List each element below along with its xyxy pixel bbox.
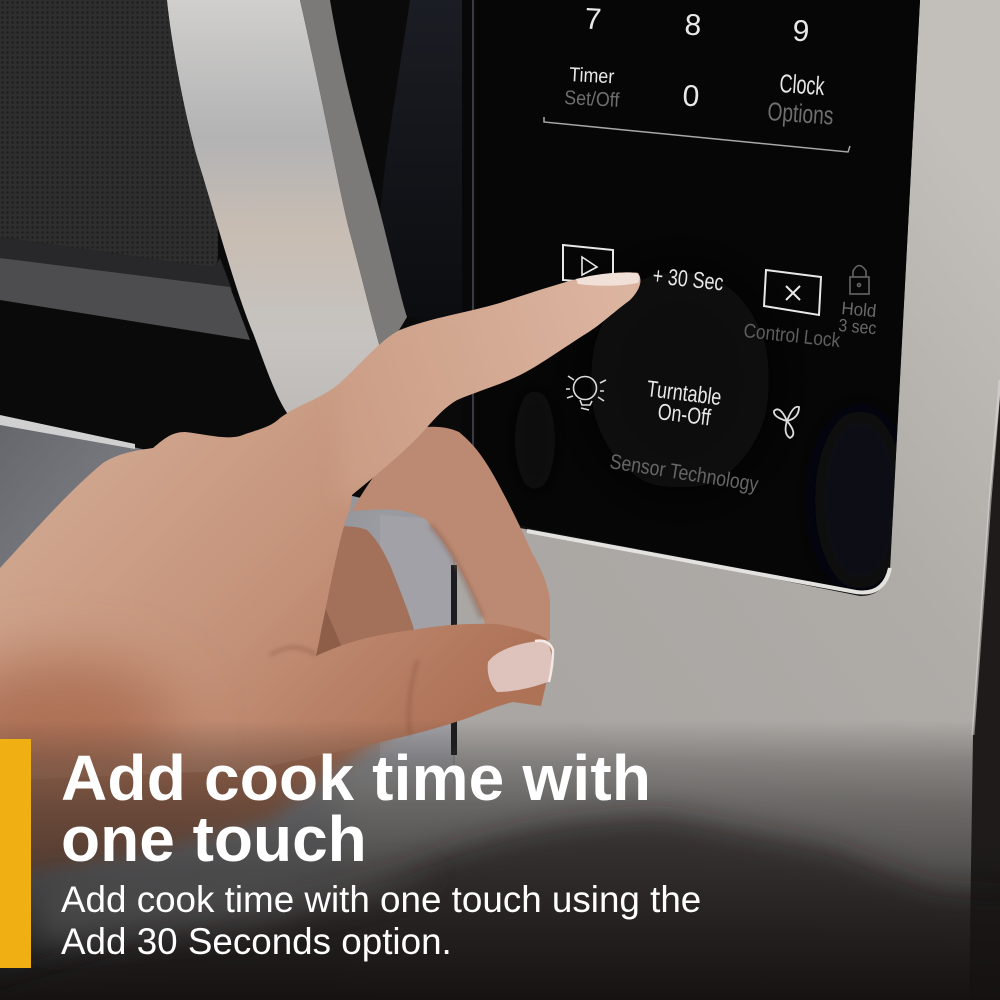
ring finger [298, 526, 422, 670]
control panel labels: 7 [584, 3, 602, 36]
control panel labels: Set/Off [564, 87, 620, 112]
blurred palm base [0, 725, 400, 872]
icon: light bulb [566, 376, 606, 410]
middle finger [352, 427, 550, 640]
control panel labels: On-Off [656, 398, 713, 430]
steel corner edge highlight [973, 380, 1000, 735]
control panel labels: Turntable [645, 375, 723, 410]
icon: cancel button [764, 270, 821, 315]
finger creases [270, 648, 418, 735]
control panel labels: Hold [841, 298, 877, 321]
icon: play button [563, 245, 613, 284]
blurred lower steel blend [340, 775, 600, 1000]
stainless steel frame [455, 0, 1000, 1000]
body text: Add 30 Seconds option. [61, 921, 452, 962]
panel reflections [824, 422, 894, 578]
control panel labels: 0 [682, 80, 700, 113]
body text: Add cook time with one touch using the [61, 879, 701, 920]
control panel labels: 9 [792, 15, 810, 48]
blurred grey foreground band [40, 870, 440, 945]
control panel labels: 8 [684, 9, 702, 42]
control panel labels: 3 sec [838, 315, 877, 338]
control panel labels [564, 3, 877, 496]
panel bright edge [527, 531, 890, 592]
thumb nail tip [535, 641, 553, 682]
icon: lock [850, 266, 869, 294]
bracket line [544, 117, 850, 152]
control panel labels: Timer [569, 64, 615, 88]
control panel labels: Control Lock [742, 320, 842, 352]
heading [61, 742, 651, 875]
door seam and silver strip [380, 515, 457, 1000]
yellow accent bar [0, 739, 31, 968]
ring finger shade [298, 591, 344, 660]
control panel labels: Options [767, 96, 835, 131]
body text [61, 879, 701, 962]
control panel labels: + 30 Sec [651, 262, 725, 295]
dark right cabinet edge [969, 395, 1000, 1000]
control panel labels: Sensor Technology [608, 450, 760, 496]
hand [0, 240, 650, 872]
glass control panel [476, 0, 920, 591]
middle finger shadow [430, 525, 482, 618]
palm and thumb shading [0, 660, 180, 800]
thumb fingernail [488, 640, 551, 692]
soft shade behind caption [0, 720, 1000, 1000]
icon: fan [774, 407, 799, 438]
door handle [167, 0, 407, 440]
control panel labels: Clock [779, 68, 826, 101]
heading: one touch [61, 803, 367, 875]
microwave door background [0, 0, 480, 1000]
blurred dark foreground shape [0, 815, 1000, 1000]
index finger lighter tone [0, 272, 640, 778]
index fingernail [576, 273, 640, 286]
handle textured strip [300, 0, 407, 347]
palm, thumb and index finger [0, 272, 640, 780]
heading: Add cook time with [61, 742, 651, 814]
